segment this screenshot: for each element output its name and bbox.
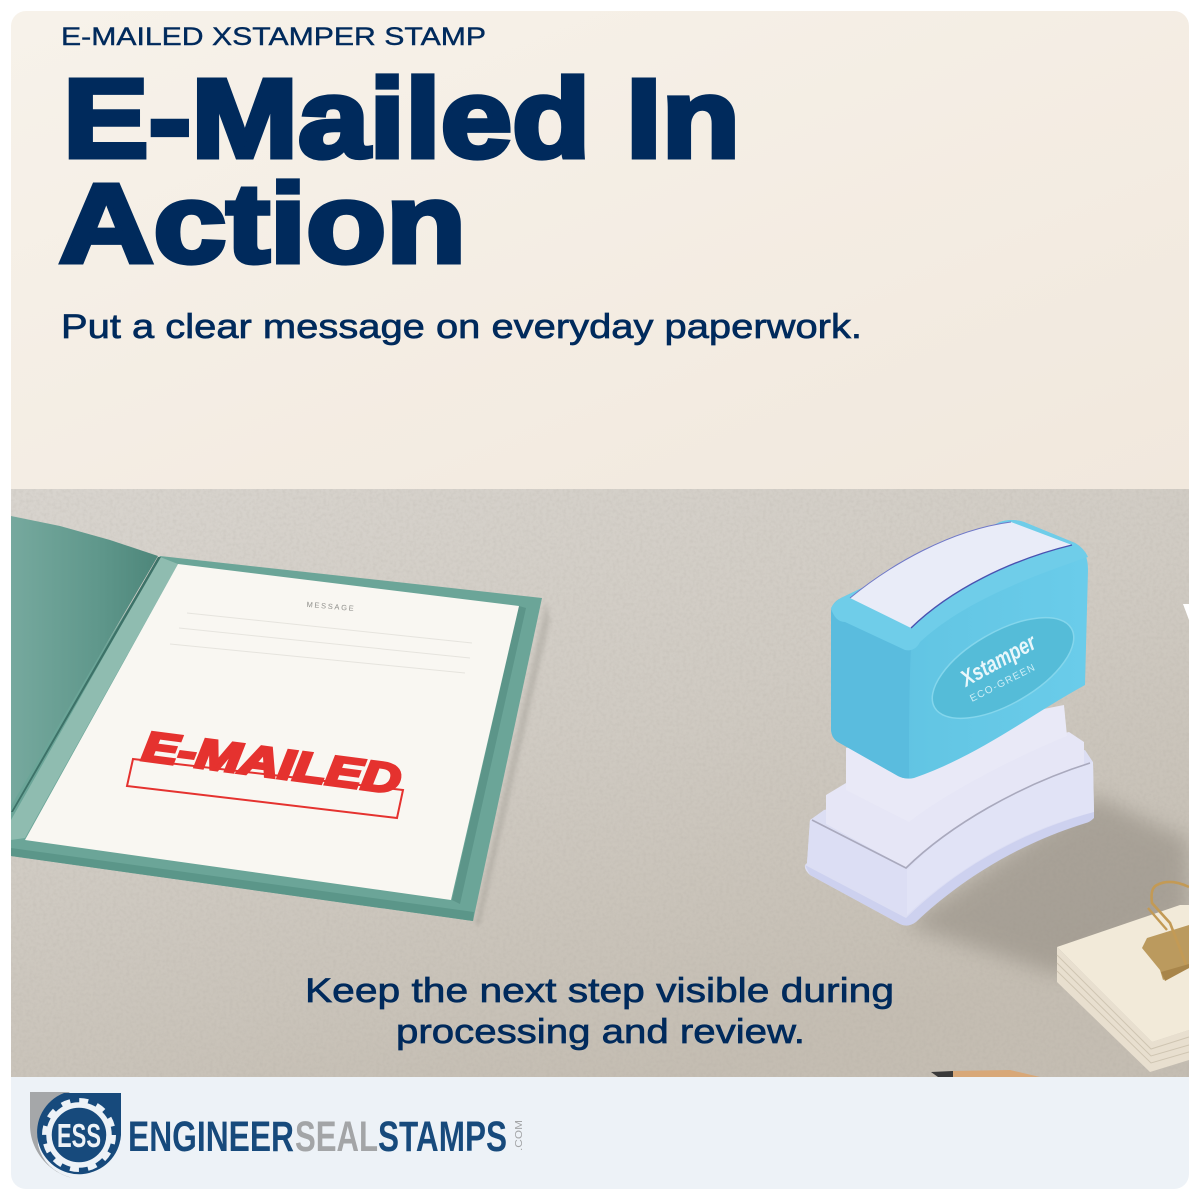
folder [11, 516, 550, 925]
binder clip [1142, 882, 1189, 981]
caption [305, 972, 894, 1051]
eyebrow: E-MAILED XSTAMPER STAMP [61, 23, 486, 51]
logo emblem [30, 1092, 121, 1178]
title: E-Mailed In [63, 56, 740, 181]
stamp neck [846, 705, 1067, 783]
red stamped impression [127, 722, 404, 818]
brand text: Xstamper [954, 628, 1041, 692]
tray rim line [812, 763, 1090, 868]
brand subtext: ECO-GREEN [968, 662, 1038, 705]
logo [30, 1092, 525, 1178]
logo domain suffix: .COM [514, 1120, 525, 1151]
stamp top label [850, 522, 1072, 628]
stamped word: E-MAILED [140, 722, 404, 803]
stamped box [127, 759, 403, 818]
stamp blue cap [831, 520, 1088, 779]
pencil [931, 1070, 1040, 1077]
paper stack [1057, 905, 1189, 1072]
table surface [11, 489, 1189, 1079]
subtitle: Put a clear message on everyday paperwork. [61, 308, 862, 346]
caption: processing and review. [396, 1013, 805, 1051]
logo wordmark: ENGINEER [128, 1113, 294, 1161]
wall background [11, 11, 1189, 489]
stamp base tray [805, 750, 1094, 925]
notch [1183, 604, 1189, 620]
writing lines [170, 613, 472, 673]
oval badge [932, 617, 1074, 719]
folder left flap [11, 516, 158, 806]
title [59, 56, 740, 286]
footer band [11, 1077, 1189, 1189]
stamp shadow [905, 795, 1189, 975]
stamp lower block [826, 732, 1084, 868]
caption: Keep the next step visible during [305, 972, 894, 1010]
message paper [25, 564, 519, 900]
logo initials: ESS [57, 1117, 101, 1154]
logo wordmark: STAMPS [378, 1113, 507, 1161]
title: Action [59, 161, 466, 286]
xstamper stamp [805, 520, 1094, 926]
logo wordmark: SEAL [295, 1113, 378, 1161]
logo wordmark [128, 1113, 507, 1161]
message label: MESSAGE [306, 600, 356, 613]
